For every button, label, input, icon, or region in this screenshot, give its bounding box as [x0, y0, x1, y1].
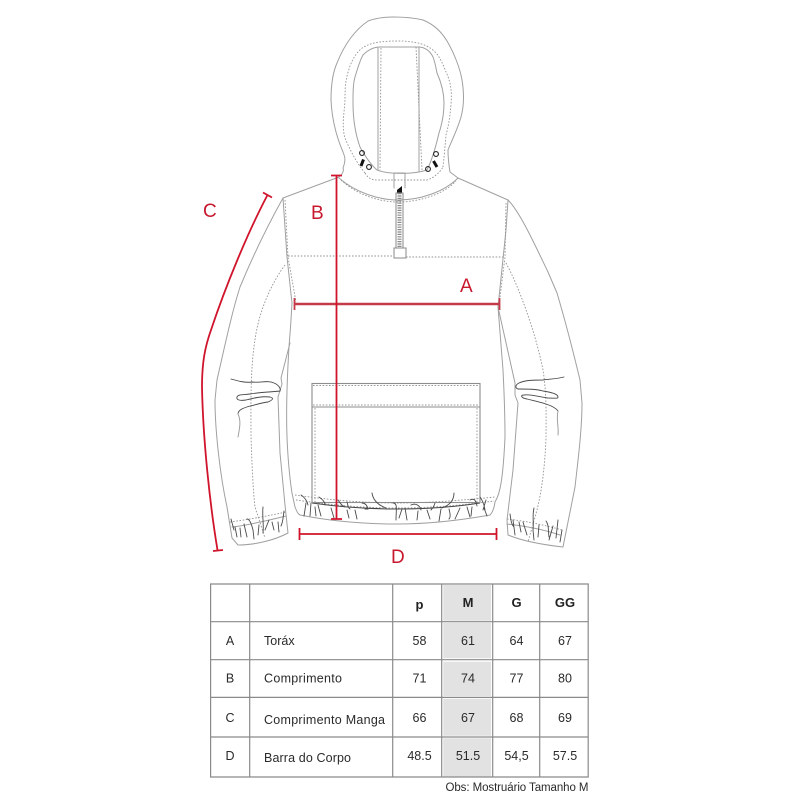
right sleeve	[498, 200, 582, 547]
table header: GG	[555, 595, 575, 610]
measure B: length: B	[311, 203, 324, 224]
row C: 67	[461, 711, 475, 725]
left sleeve	[215, 198, 290, 545]
row A: 58	[413, 634, 426, 648]
row A	[226, 634, 572, 648]
row D	[225, 749, 577, 765]
measure D: hem width	[299, 528, 496, 568]
row A: A	[226, 634, 235, 648]
row C	[225, 711, 572, 727]
measure D: hem width: D	[391, 547, 405, 568]
measure A: chest: A	[460, 276, 473, 297]
kangaroo pocket	[312, 384, 480, 502]
row D: 57.5	[553, 749, 577, 763]
table header: M	[463, 595, 473, 610]
hem gathers	[301, 493, 487, 521]
collar and zipper	[339, 173, 458, 258]
hood toggles	[360, 151, 438, 171]
measure C: sleeve length	[202, 192, 272, 551]
measure C: sleeve length: C	[203, 201, 217, 222]
row B: 77	[510, 672, 523, 686]
row C: Comprimento Manga	[264, 713, 385, 727]
measure A: chest	[294, 276, 500, 310]
row A: Toráx	[264, 634, 295, 648]
row A: 61	[461, 634, 475, 648]
row C: 66	[413, 711, 426, 725]
table header: G	[511, 595, 522, 610]
row B: Comprimento	[264, 672, 342, 686]
row D: 51.5	[456, 749, 480, 763]
size table	[211, 584, 588, 777]
hood	[331, 17, 463, 180]
highlighted M column	[443, 585, 491, 776]
measure B: length	[311, 176, 342, 519]
row C: 68	[510, 711, 523, 725]
row B: 80	[558, 672, 572, 686]
row A: 67	[558, 634, 572, 648]
body	[283, 177, 508, 524]
row C: 69	[558, 711, 572, 725]
row C: C	[225, 711, 235, 725]
row B: 71	[413, 672, 426, 686]
row B	[226, 672, 572, 686]
row A: 64	[510, 634, 523, 648]
row D: Barra do Corpo	[264, 751, 351, 765]
footnote: Obs: Mostruário Tamanho M	[446, 782, 588, 794]
table header	[416, 595, 575, 612]
row D: 48.5	[407, 749, 432, 763]
row D: 54,5	[504, 749, 529, 763]
table header: p	[416, 597, 424, 612]
row B: 74	[461, 672, 475, 686]
row D: D	[225, 749, 235, 763]
row B: B	[226, 672, 234, 686]
jacket technical drawing	[215, 17, 582, 547]
table grid	[211, 584, 588, 777]
